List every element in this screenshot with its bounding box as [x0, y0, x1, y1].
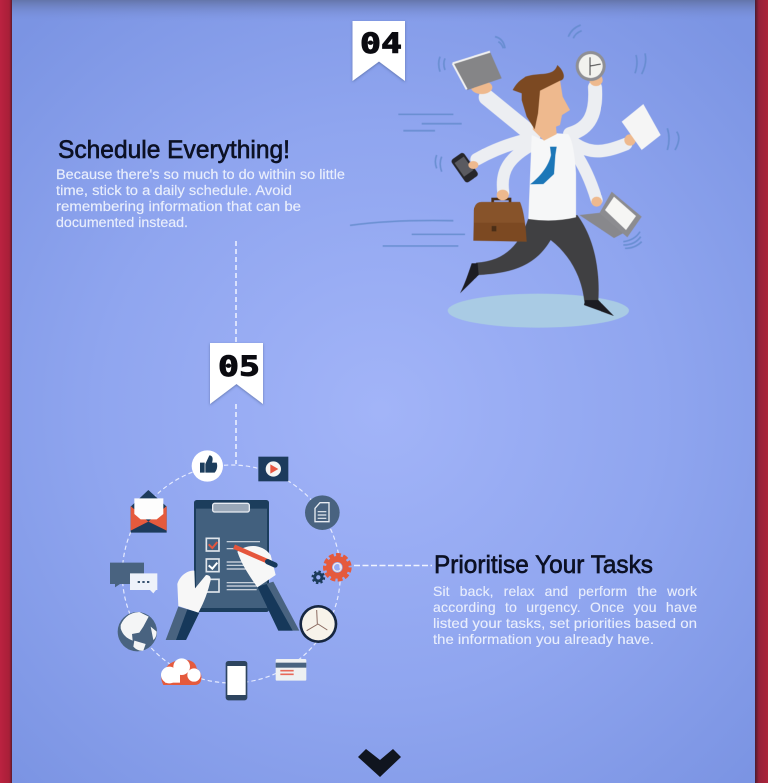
badge: step 04: [352, 21, 405, 81]
text block: prioritise description: [433, 583, 698, 647]
text block: schedule description: Because there's so much to do within so little: [56, 167, 345, 183]
hair: [513, 65, 564, 129]
hand on phone: [468, 161, 478, 169]
dashed ring: [122, 465, 340, 683]
icon: globe: [118, 612, 157, 651]
text block: prioritise description: the information you already have.: [433, 631, 654, 647]
icon: thumbs up: [192, 450, 223, 482]
left sleeve: [166, 607, 199, 640]
dashed connector: 04 to 05: [235, 241, 237, 342]
face: [533, 80, 570, 141]
icon: video: [258, 457, 288, 481]
hand on laptop: [591, 197, 602, 207]
icon: cloud: [161, 658, 201, 685]
illustration: task ring with clipboard: [110, 450, 349, 700]
illustration: multitasking businessman: [350, 25, 679, 328]
left hand: [177, 571, 211, 613]
shirt: [528, 133, 576, 220]
right sleeve: [257, 582, 299, 631]
heading: prioritise your tasks: Prioritise Your Tasks: [434, 551, 653, 579]
phone: [450, 152, 479, 184]
icon: envelope: [131, 490, 167, 533]
dashed connector: gear to heading: [354, 564, 432, 566]
laptop: [579, 213, 628, 238]
icon: clock: [299, 605, 337, 643]
text block: prioritise description: listed your tasks, set priorities based on: [433, 615, 697, 631]
tie: [530, 147, 557, 184]
briefcase: [493, 199, 510, 203]
shoes: [460, 263, 614, 316]
icon: gears: [313, 555, 349, 583]
icon: chat bubbles: [110, 563, 157, 593]
clipboard: [194, 500, 269, 612]
arms: [477, 87, 626, 200]
wall clock: [576, 51, 606, 81]
badge: step 05: 05: [218, 350, 260, 382]
icon: document: [305, 495, 340, 530]
text block: schedule description: remembering information that can be: [56, 199, 301, 215]
icon: credit card: [276, 659, 306, 681]
dashed connector: 05 to illustration: [235, 404, 237, 464]
pen: [234, 547, 268, 562]
ground ellipse: [448, 294, 629, 328]
badge: step 05: [210, 343, 263, 404]
text block: prioritise description: Sit back, relax and perform the work: [433, 583, 698, 599]
motion lines: [350, 25, 679, 248]
paper: [622, 104, 661, 150]
heading: schedule everything: Schedule Everything!: [58, 136, 290, 164]
text block: schedule description: documented instead.: [56, 215, 188, 231]
right hand: [237, 546, 276, 587]
text block: schedule description: time, stick to a daily schedule. Avoid: [56, 183, 292, 199]
icon: smartphone: [226, 661, 247, 700]
book: [453, 52, 502, 90]
hand on briefcase: [497, 190, 509, 200]
hands: [471, 74, 636, 146]
checkboxes: [206, 538, 219, 551]
trousers: [476, 215, 599, 302]
text block: prioritise description: according to urgency. Once you have: [433, 599, 697, 615]
arrow: continue down chevron: [358, 749, 401, 777]
badge: step 04: 04: [360, 26, 402, 60]
text block: schedule description: [56, 167, 345, 231]
